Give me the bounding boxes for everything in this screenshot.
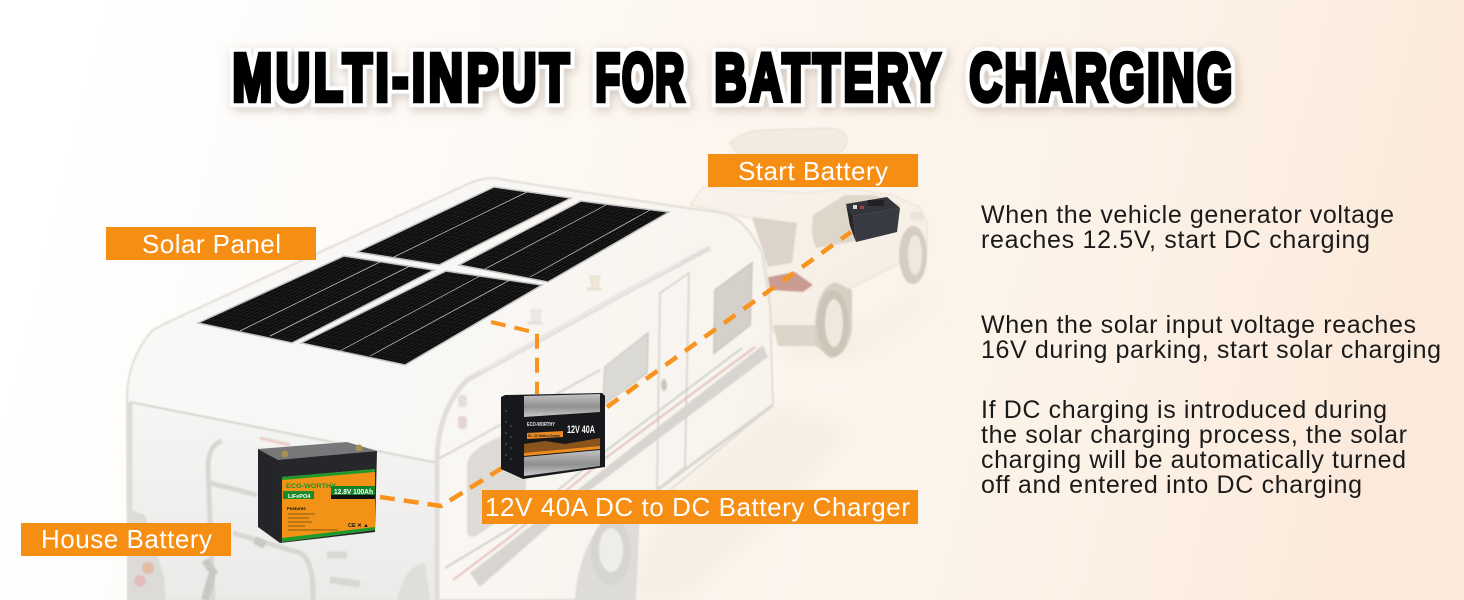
roof vents bbox=[528, 310, 542, 324]
title: FOR bbox=[596, 40, 684, 115]
dashed cable: house battery to charger bbox=[380, 468, 502, 506]
title bbox=[232, 40, 1232, 116]
text block: charging priority: the solar charging process, the solar bbox=[981, 421, 1407, 449]
label: house battery: House Battery bbox=[41, 524, 212, 554]
icon: house battery: 12.8V 100Ah bbox=[334, 489, 373, 496]
title: CHARGING bbox=[970, 41, 1232, 116]
solar panel array bbox=[198, 187, 669, 365]
icon: house battery: LiFePO4 bbox=[288, 494, 311, 500]
label: start battery bbox=[708, 154, 918, 187]
illustration: tow car bbox=[690, 128, 927, 358]
text block: solar charging condition: 16V during parking, start solar charging bbox=[981, 336, 1441, 364]
side lamp bbox=[458, 395, 467, 407]
label: solar panel: Solar Panel bbox=[142, 229, 281, 259]
label: DC to DC charger: 12V 40A DC to DC Battery Charger bbox=[485, 492, 910, 522]
icon: DC to DC charger: ECO-WORTHY bbox=[527, 422, 555, 428]
icon: DC to DC charger bbox=[501, 393, 605, 479]
text block: charging priority: off and entered into DC charging bbox=[981, 471, 1362, 499]
wheel bbox=[575, 505, 640, 600]
icon: house battery: Features bbox=[287, 506, 306, 511]
icon: house battery bbox=[258, 442, 377, 543]
text block: charging priority: If DC charging is introduced during bbox=[981, 396, 1387, 424]
icon: DC to DC charger: DC - DC Battery Charger bbox=[528, 433, 560, 438]
icon: house battery: CE ✕ ▲ bbox=[348, 522, 369, 529]
ground shadow bbox=[625, 285, 930, 600]
text block: charging priority: charging will be automatically turned bbox=[981, 446, 1406, 474]
title: MULTI-INPUT bbox=[232, 41, 569, 115]
icon: start battery bbox=[846, 197, 900, 242]
title: BATTERY bbox=[714, 41, 940, 116]
dashed cable: charger to start battery bbox=[607, 232, 851, 407]
text block: DC charging condition: reaches 12.5V, start DC charging bbox=[981, 226, 1370, 254]
dashed cable: solar panel to charger bbox=[491, 322, 537, 394]
side stripes bbox=[470, 345, 768, 587]
text block: solar charging condition: When the solar input voltage reaches bbox=[981, 311, 1416, 339]
rear lights bbox=[131, 510, 165, 600]
label: start battery: Start Battery bbox=[738, 156, 888, 186]
icon: DC to DC charger: 12V 40A bbox=[567, 424, 595, 436]
text block: DC charging condition: When the vehicle generator voltage bbox=[981, 201, 1394, 229]
label: solar panel bbox=[106, 227, 316, 260]
icon: house battery: ECO-WORTHY bbox=[286, 483, 337, 490]
text block: DC charging condition bbox=[981, 201, 1394, 254]
text block: solar charging condition bbox=[981, 311, 1441, 364]
text block: charging priority bbox=[981, 396, 1407, 499]
rear ladder bbox=[205, 441, 360, 600]
side windows bbox=[467, 425, 530, 537]
illustration: caravan bbox=[127, 178, 773, 600]
